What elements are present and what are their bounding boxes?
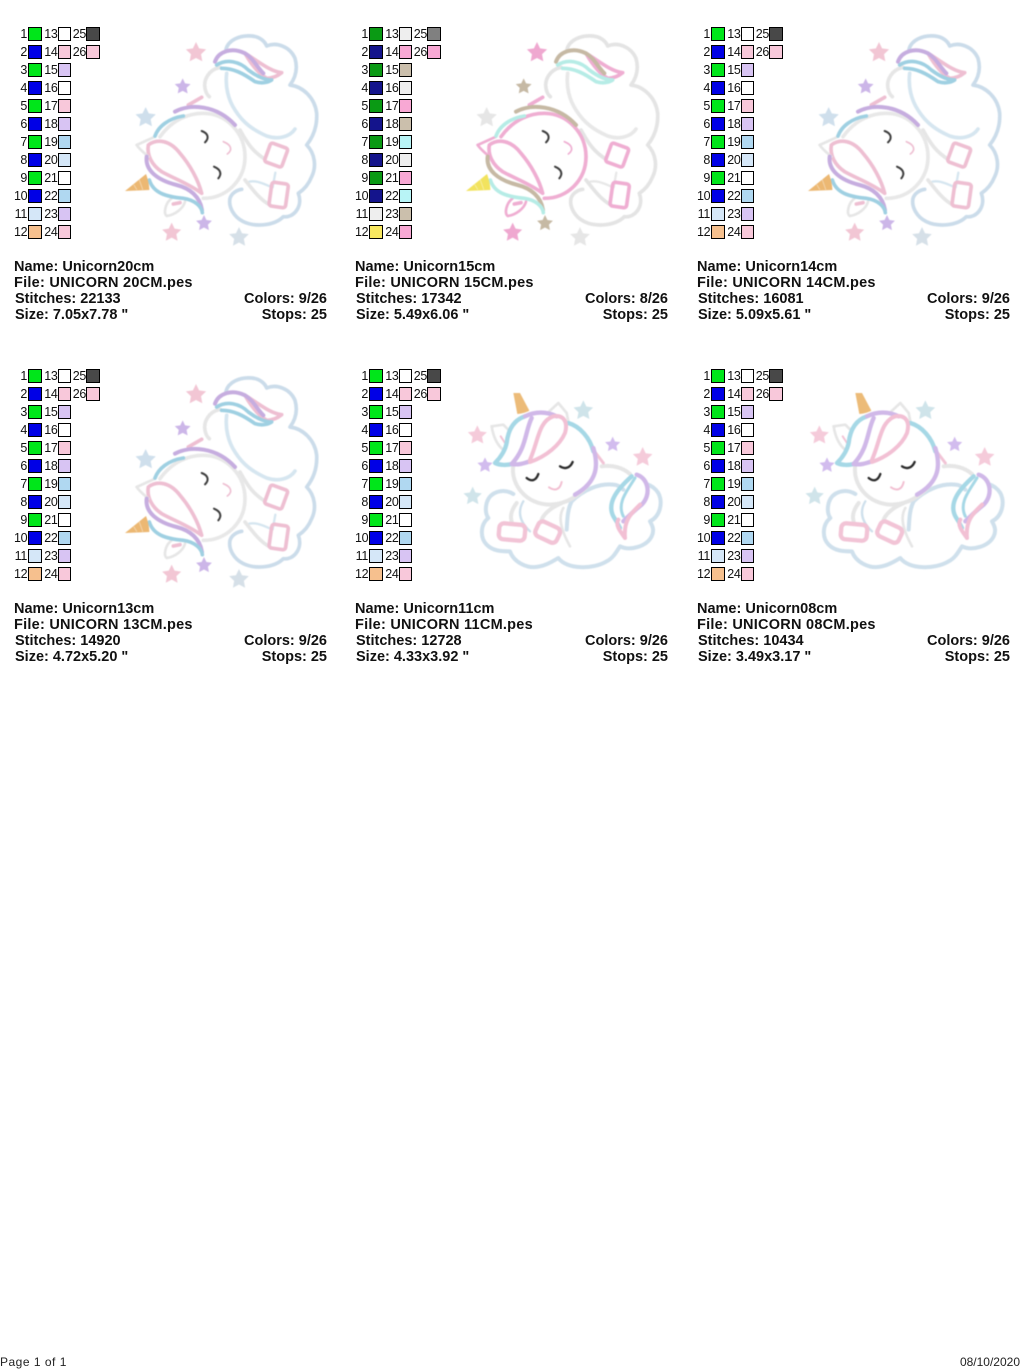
colour legend: 4 bbox=[361, 423, 368, 437]
colour legend: 8 bbox=[20, 153, 27, 167]
colour legend: 17 bbox=[44, 99, 58, 113]
colour legend: 26 bbox=[756, 387, 769, 401]
colour legend: 10 bbox=[355, 531, 368, 545]
stops: Stops: 25 bbox=[945, 307, 1010, 323]
colour legend: 3 bbox=[361, 63, 368, 77]
colour legend: 16 bbox=[385, 81, 398, 95]
colour legend: 21 bbox=[727, 171, 740, 185]
size: Size: 5.49x6.06 " bbox=[356, 307, 469, 323]
colour legend: 8 bbox=[20, 495, 27, 509]
colour legend: 21 bbox=[44, 513, 58, 527]
stitches: Stitches: 10434 bbox=[698, 633, 804, 649]
colour legend: 16 bbox=[727, 81, 740, 95]
colour legend: 23 bbox=[385, 549, 398, 563]
colour legend: 15 bbox=[44, 63, 58, 77]
colour legend: 15 bbox=[727, 63, 740, 77]
colour legend: 15 bbox=[385, 63, 398, 77]
panel: Unicorn15cm bbox=[355, 27, 668, 323]
colour legend: 3 bbox=[20, 63, 27, 77]
colour legend: 7 bbox=[20, 477, 27, 491]
colour legend: 3 bbox=[703, 63, 710, 77]
colors: Colors: 9/26 bbox=[585, 633, 668, 649]
colour legend: 4 bbox=[703, 423, 710, 437]
colour legend: 25 bbox=[73, 27, 86, 41]
file: File: UNICORN 20CM.pes bbox=[14, 275, 193, 291]
colour legend: 14 bbox=[44, 387, 58, 401]
colour legend: 19 bbox=[44, 477, 58, 491]
colour legend: 17 bbox=[44, 441, 58, 455]
unicorn embroidery design bbox=[466, 34, 660, 246]
colour legend: 22 bbox=[385, 189, 398, 203]
colour legend: 11 bbox=[698, 549, 710, 563]
colour legend: 16 bbox=[44, 423, 58, 437]
colour legend: 22 bbox=[385, 531, 398, 545]
colour legend bbox=[355, 27, 441, 239]
colour legend: 13 bbox=[44, 27, 58, 41]
colour legend: 2 bbox=[361, 387, 368, 401]
colour legend: 22 bbox=[44, 189, 58, 203]
colour legend: 4 bbox=[361, 81, 368, 95]
colour legend: 23 bbox=[44, 207, 58, 221]
colour legend: 10 bbox=[14, 531, 27, 545]
colour legend: 21 bbox=[44, 171, 58, 185]
colour legend: 11 bbox=[698, 207, 710, 221]
colour legend: 25 bbox=[756, 369, 769, 383]
colour legend: 4 bbox=[703, 81, 710, 95]
colour legend: 4 bbox=[20, 81, 27, 95]
colour legend: 13 bbox=[727, 27, 740, 41]
colour legend: 11 bbox=[15, 207, 27, 221]
colour legend: 14 bbox=[385, 387, 398, 401]
colour legend: 12 bbox=[697, 225, 710, 239]
colour legend: 22 bbox=[44, 531, 58, 545]
unicorn embroidery design bbox=[124, 34, 319, 246]
colour legend: 10 bbox=[697, 189, 710, 203]
colour legend: 6 bbox=[361, 117, 368, 131]
unicorn embroidery design bbox=[464, 392, 663, 570]
colors: Colors: 9/26 bbox=[927, 633, 1010, 649]
colour legend: 24 bbox=[385, 567, 398, 581]
colour legend: 7 bbox=[361, 477, 368, 491]
colour legend: 18 bbox=[727, 459, 740, 473]
colour legend: 8 bbox=[703, 153, 710, 167]
colour legend: 21 bbox=[385, 513, 398, 527]
colour legend: 21 bbox=[385, 171, 398, 185]
name: Name: Unicorn20cm bbox=[14, 259, 154, 275]
colour legend: 12 bbox=[355, 225, 368, 239]
colour legend: 5 bbox=[20, 99, 27, 113]
colour legend: 12 bbox=[14, 567, 27, 581]
colour legend bbox=[14, 27, 100, 239]
colour legend: 6 bbox=[703, 459, 710, 473]
colors: Colors: 9/26 bbox=[244, 291, 327, 307]
colour legend: 4 bbox=[20, 423, 27, 437]
file: File: UNICORN 15CM.pes bbox=[355, 275, 534, 291]
stitches: Stitches: 16081 bbox=[698, 291, 804, 307]
colors: Colors: 8/26 bbox=[585, 291, 668, 307]
colour legend: 20 bbox=[385, 153, 398, 167]
colour legend: 11 bbox=[15, 549, 27, 563]
colour legend: 6 bbox=[703, 117, 710, 131]
name: Name: Unicorn15cm bbox=[355, 259, 495, 275]
colour legend: 10 bbox=[14, 189, 27, 203]
colour legend: 13 bbox=[385, 27, 398, 41]
colour legend: 2 bbox=[361, 45, 368, 59]
stops: Stops: 25 bbox=[603, 649, 668, 665]
colour legend: 18 bbox=[385, 117, 398, 131]
colour legend: 20 bbox=[727, 495, 740, 509]
stitches: Stitches: 14920 bbox=[15, 633, 121, 649]
file: File: UNICORN 13CM.pes bbox=[14, 617, 193, 633]
colour legend: 18 bbox=[727, 117, 740, 131]
colour legend: 9 bbox=[361, 171, 368, 185]
colour legend: 9 bbox=[20, 513, 27, 527]
colour legend: 5 bbox=[20, 441, 27, 455]
colors: Colors: 9/26 bbox=[244, 633, 327, 649]
name: Name: Unicorn08cm bbox=[697, 601, 837, 617]
colour legend: 1 bbox=[20, 369, 27, 383]
colour legend: 14 bbox=[727, 45, 740, 59]
colour legend: 20 bbox=[44, 495, 58, 509]
colour legend: 3 bbox=[361, 405, 368, 419]
colour legend: 16 bbox=[727, 423, 740, 437]
panel: Unicorn14cm bbox=[697, 27, 1010, 323]
footer: date: 08/10/2020 bbox=[960, 1355, 1020, 1369]
colour legend: 1 bbox=[703, 369, 710, 383]
colour legend: 1 bbox=[361, 369, 368, 383]
colour legend: 7 bbox=[703, 135, 710, 149]
colour legend: 10 bbox=[355, 189, 368, 203]
colour legend: 25 bbox=[414, 27, 427, 41]
colour legend: 9 bbox=[20, 171, 27, 185]
colour legend: 7 bbox=[20, 135, 27, 149]
colour legend: 23 bbox=[727, 549, 740, 563]
unicorn embroidery design bbox=[808, 34, 1002, 246]
colour legend: 22 bbox=[727, 189, 740, 203]
colour legend: 24 bbox=[385, 225, 398, 239]
colour legend: 20 bbox=[727, 153, 740, 167]
colour legend: 14 bbox=[385, 45, 398, 59]
stitches: Stitches: 12728 bbox=[356, 633, 462, 649]
stops: Stops: 25 bbox=[945, 649, 1010, 665]
colour legend: 12 bbox=[697, 567, 710, 581]
size: Size: 4.72x5.20 " bbox=[15, 649, 128, 665]
colour legend: 19 bbox=[385, 135, 398, 149]
name: Name: Unicorn13cm bbox=[14, 601, 154, 617]
colour legend: 6 bbox=[20, 117, 27, 131]
stops: Stops: 25 bbox=[262, 649, 327, 665]
colour legend: 16 bbox=[385, 423, 398, 437]
colour legend: 26 bbox=[73, 387, 86, 401]
colour legend: 5 bbox=[361, 441, 368, 455]
colour legend: 1 bbox=[361, 27, 368, 41]
colour legend: 25 bbox=[756, 27, 769, 41]
colour legend: 24 bbox=[44, 567, 58, 581]
colour legend: 17 bbox=[385, 99, 398, 113]
colour legend: 3 bbox=[20, 405, 27, 419]
colour legend: 21 bbox=[727, 513, 740, 527]
file: File: UNICORN 14CM.pes bbox=[697, 275, 876, 291]
colour legend: 8 bbox=[703, 495, 710, 509]
panel: Unicorn11cm bbox=[355, 369, 668, 665]
colour legend: 9 bbox=[703, 513, 710, 527]
colour legend: 7 bbox=[703, 477, 710, 491]
panel: Unicorn13cm bbox=[14, 369, 327, 665]
colour legend: 5 bbox=[361, 99, 368, 113]
colour legend: 12 bbox=[355, 567, 368, 581]
unicorn embroidery design bbox=[124, 376, 319, 588]
colour legend: 2 bbox=[703, 387, 710, 401]
colour legend: 20 bbox=[44, 153, 58, 167]
colour legend: 9 bbox=[361, 513, 368, 527]
colour legend: 14 bbox=[44, 45, 58, 59]
size: Size: 3.49x3.17 " bbox=[698, 649, 811, 665]
colour legend: 6 bbox=[20, 459, 27, 473]
size: Size: 5.09x5.61 " bbox=[698, 307, 811, 323]
colour legend: 23 bbox=[44, 549, 58, 563]
colour legend: 26 bbox=[414, 45, 427, 59]
stitches: Stitches: 22133 bbox=[15, 291, 121, 307]
name: Name: Unicorn11cm bbox=[355, 601, 494, 617]
colour legend: 10 bbox=[697, 531, 710, 545]
colour legend: 5 bbox=[703, 99, 710, 113]
colour legend: 8 bbox=[361, 153, 368, 167]
colour legend bbox=[697, 27, 783, 239]
colour legend: 24 bbox=[727, 225, 740, 239]
colour legend: 17 bbox=[385, 441, 398, 455]
panel: Unicorn20cm bbox=[14, 27, 327, 323]
colour legend: 12 bbox=[14, 225, 27, 239]
unicorn embroidery design bbox=[806, 392, 1005, 570]
colour legend: 3 bbox=[703, 405, 710, 419]
colour legend: 23 bbox=[727, 207, 740, 221]
name: Name: Unicorn14cm bbox=[697, 259, 837, 275]
colour legend: 26 bbox=[73, 45, 86, 59]
colour legend: 2 bbox=[20, 45, 27, 59]
colour legend: 22 bbox=[727, 531, 740, 545]
colors: Colors: 9/26 bbox=[927, 291, 1010, 307]
colour legend: 19 bbox=[385, 477, 398, 491]
colour legend: 24 bbox=[727, 567, 740, 581]
colour legend: 15 bbox=[727, 405, 740, 419]
size: Size: 7.05x7.78 " bbox=[15, 307, 128, 323]
colour legend: 18 bbox=[44, 117, 58, 131]
colour legend bbox=[14, 369, 100, 581]
colour legend: 1 bbox=[20, 27, 27, 41]
stops: Stops: 25 bbox=[603, 307, 668, 323]
colour legend: 7 bbox=[361, 135, 368, 149]
colour legend: 8 bbox=[361, 495, 368, 509]
colour legend: 26 bbox=[756, 45, 769, 59]
colour legend: 25 bbox=[414, 369, 427, 383]
colour legend: 19 bbox=[727, 135, 740, 149]
colour legend: 15 bbox=[385, 405, 398, 419]
colour legend: 13 bbox=[44, 369, 58, 383]
colour legend: 1 bbox=[703, 27, 710, 41]
colour legend: 2 bbox=[703, 45, 710, 59]
colour legend: 20 bbox=[385, 495, 398, 509]
size: Size: 4.33x3.92 " bbox=[356, 649, 469, 665]
colour legend: 9 bbox=[703, 171, 710, 185]
colour legend: 26 bbox=[414, 387, 427, 401]
colour legend: 18 bbox=[44, 459, 58, 473]
colour legend: 11 bbox=[356, 549, 368, 563]
panel: Unicorn08cm bbox=[697, 369, 1010, 665]
colour legend: 13 bbox=[727, 369, 740, 383]
colour legend: 11 bbox=[356, 207, 368, 221]
colour legend: 14 bbox=[727, 387, 740, 401]
colour legend: 24 bbox=[44, 225, 58, 239]
file: File: UNICORN 08CM.pes bbox=[697, 617, 876, 633]
colour legend: 17 bbox=[727, 441, 740, 455]
colour legend: 25 bbox=[73, 369, 86, 383]
file: File: UNICORN 11CM.pes bbox=[355, 617, 533, 633]
colour legend: 23 bbox=[385, 207, 398, 221]
colour legend: 13 bbox=[385, 369, 398, 383]
colour legend: 2 bbox=[20, 387, 27, 401]
footer: page number: Page 1 of 1 bbox=[0, 1355, 67, 1369]
stitches: Stitches: 17342 bbox=[356, 291, 462, 307]
colour legend: 6 bbox=[361, 459, 368, 473]
colour legend bbox=[355, 369, 441, 581]
colour legend: 5 bbox=[703, 441, 710, 455]
colour legend: 19 bbox=[44, 135, 58, 149]
colour legend: 16 bbox=[44, 81, 58, 95]
colour legend: 15 bbox=[44, 405, 58, 419]
colour legend: 17 bbox=[727, 99, 740, 113]
colour legend: 19 bbox=[727, 477, 740, 491]
stops: Stops: 25 bbox=[262, 307, 327, 323]
colour legend bbox=[697, 369, 783, 581]
colour legend: 18 bbox=[385, 459, 398, 473]
